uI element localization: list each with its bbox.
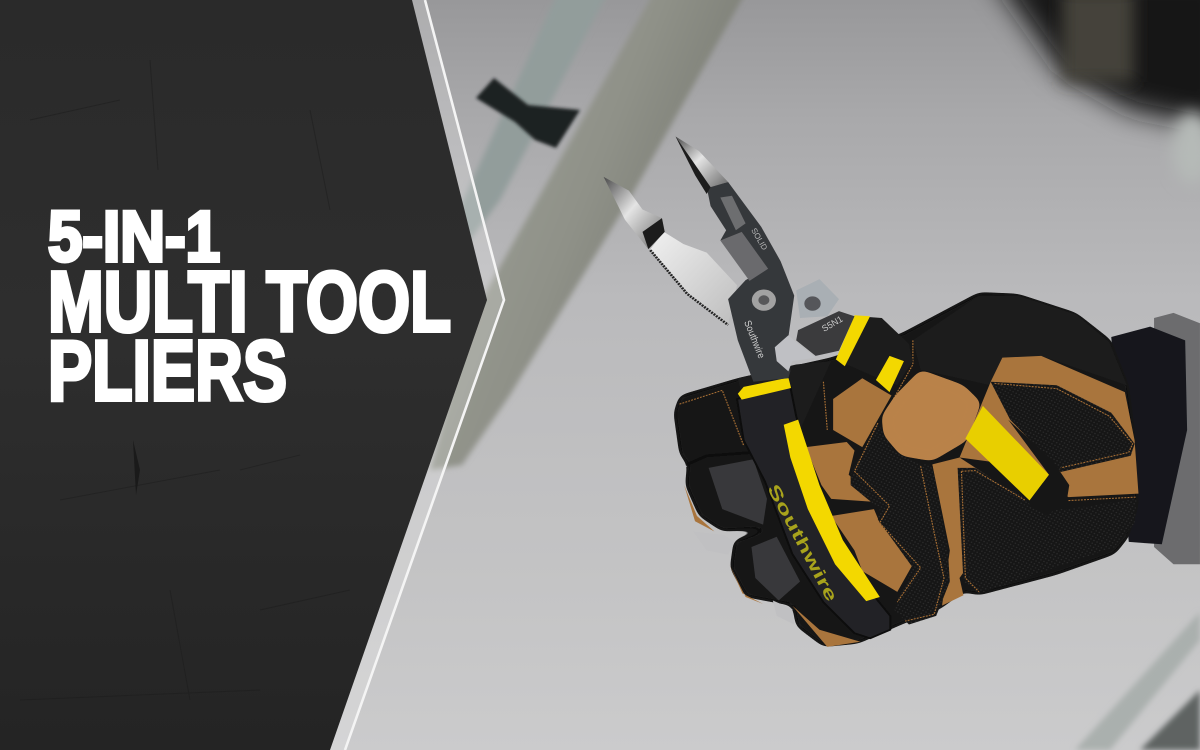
finger gap notches: [670, 459, 794, 625]
left plier handle: [737, 378, 890, 638]
chevron translucent band: [328, 0, 505, 750]
glove body: [674, 292, 1138, 647]
blurred conduit pipes: [430, 0, 1200, 750]
lower blade: [650, 232, 737, 325]
upper jaw body: [707, 182, 794, 382]
left jaw tip: [604, 177, 665, 249]
orange stitching: [679, 340, 1137, 621]
plier jaws: [604, 137, 855, 382]
dark title panel: [0, 0, 487, 750]
right jaw tang: [796, 311, 855, 356]
right plier handle: [836, 315, 1069, 516]
glove mesh back: [913, 296, 1127, 385]
model mark: S5N1: [820, 314, 844, 334]
sweater cuff: [1154, 313, 1200, 564]
fingers with grip patches: [687, 361, 831, 600]
title: MULTI TOOL: [48, 255, 451, 350]
tan palm: [684, 356, 1138, 647]
gloved hand holding pliers: [604, 137, 1200, 647]
title: 5-IN-1: [48, 198, 220, 277]
title: [48, 198, 451, 419]
lock latch: [796, 279, 839, 318]
tan thumb: [882, 370, 981, 461]
jaw cutout: [775, 335, 816, 371]
chevron white outline: [345, 0, 504, 750]
wire stripper slot: [720, 196, 746, 230]
jaw mark: SOLID: [749, 226, 769, 252]
blurred top-right shadows: [990, 0, 1200, 184]
textured black pads: [851, 382, 1137, 625]
pivot bolt: [752, 289, 776, 311]
blurred pipe clamp: [476, 78, 580, 148]
inner dark cuff: [1111, 327, 1187, 544]
brand name on handle: Southwire: [763, 481, 841, 605]
upper jaw tip: [676, 137, 728, 187]
panel scratches: [20, 60, 350, 700]
engraved brand on jaw: Southwire: [741, 319, 767, 361]
ridged crimper: [720, 232, 768, 281]
title: PLIERS: [48, 324, 287, 419]
